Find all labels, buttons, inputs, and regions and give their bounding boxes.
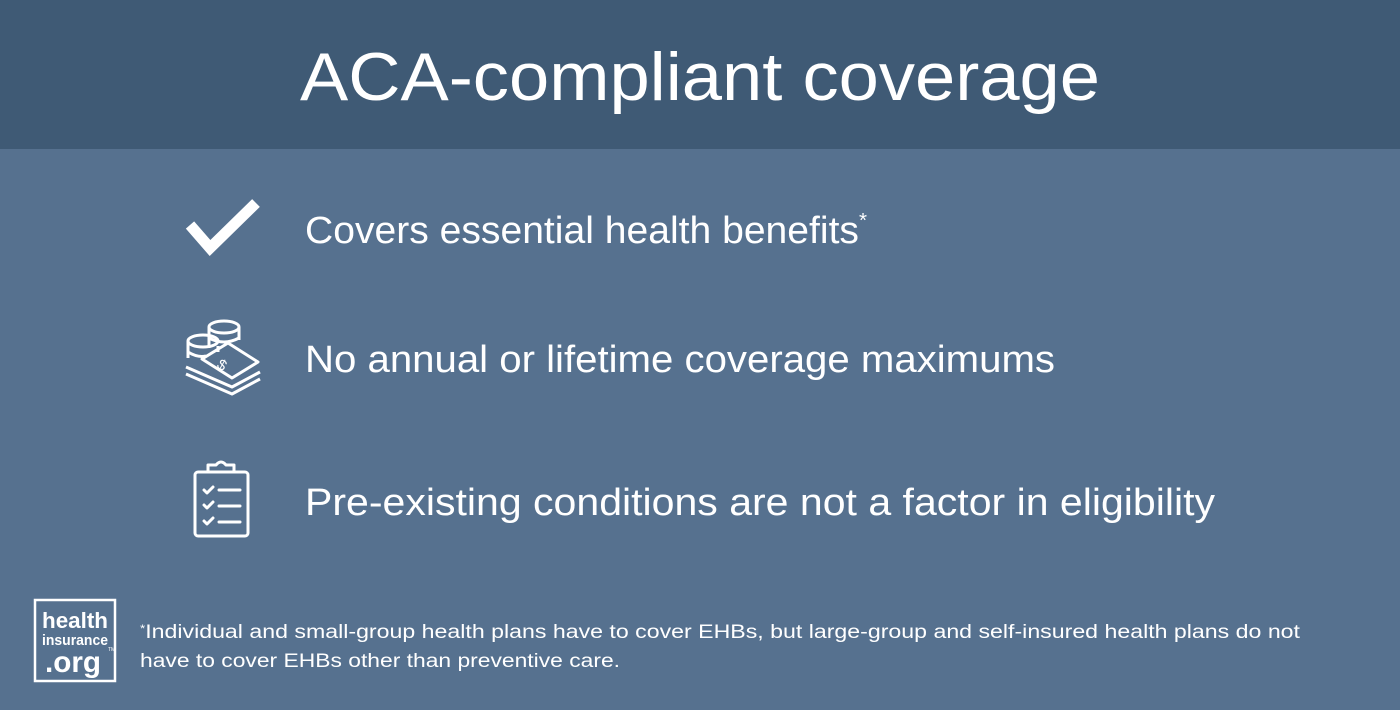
logo: healthinsurance.org: insurance <box>42 632 108 649</box>
item 3: pre-existing conditions <box>195 462 1215 536</box>
item 2: no maximums <box>186 321 1055 394</box>
logo: healthinsurance.org: TM <box>108 647 115 653</box>
title: ACA-compliant coverage <box>300 39 1100 115</box>
text: covers essential health benefits: Covers essential health benefits <box>305 210 844 252</box>
footnote: * <box>140 623 146 635</box>
text: covers essential health benefits: * <box>859 210 867 232</box>
footnote: have to cover EHBs other than preventive care. <box>140 651 620 672</box>
text: pre-existing conditions: Pre-existing conditions are not a factor in eligibility <box>305 482 1215 524</box>
logo: healthinsurance.org: .org <box>45 646 101 679</box>
footnote: Individual and small-group health plans have to cover EHBs, but large-group and self-insured health plans do not <box>145 622 1301 643</box>
logo: healthinsurance.org: health <box>42 608 108 633</box>
logo: healthinsurance.org <box>35 600 115 681</box>
icon: coins and money: $ <box>214 356 230 375</box>
icon: clipboard checklist <box>195 462 248 536</box>
item 1: essential health benefits <box>190 203 867 252</box>
icon: checkmark <box>190 203 256 248</box>
icon: coins and money <box>186 321 260 394</box>
footnote <box>140 622 1301 672</box>
header band <box>0 0 1400 149</box>
text: no annual or lifetime maximums: No annual or lifetime coverage maximums <box>305 339 1055 381</box>
